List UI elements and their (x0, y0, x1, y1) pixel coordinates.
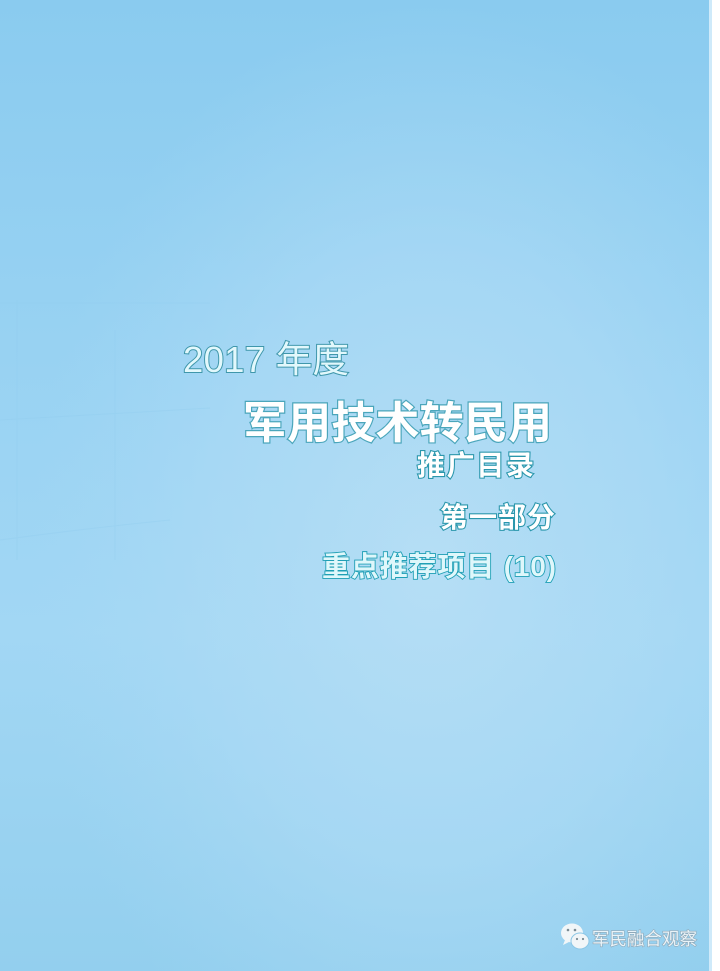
subtitle: 推广目录 (417, 450, 534, 481)
account name: 军民融合观察 (592, 929, 697, 949)
main title: 军用技术转民用 (243, 399, 552, 448)
part label: 第一部分 (440, 502, 555, 533)
section label: 重点推荐项目 (10) (322, 551, 556, 582)
year heading: 2017 年度 (183, 339, 349, 380)
icon: WeChat bubbles (561, 924, 589, 949)
watermark: WeChat account (561, 924, 697, 949)
